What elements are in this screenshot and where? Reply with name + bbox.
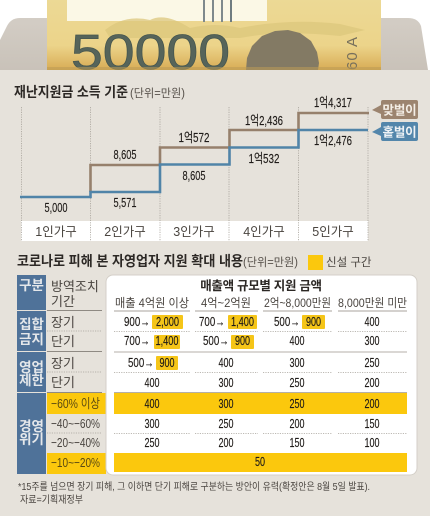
group: business restriction: 영업 (19, 360, 44, 375)
header: duration: 기간 (51, 294, 75, 309)
row: gathering ban short: 500→ (203, 333, 229, 348)
value labels: 1억572 (178, 130, 210, 145)
footnote and source: 자료=기획재정부 (20, 494, 83, 506)
row labels: 장기 (51, 315, 75, 330)
row labels: −60% 이상 (51, 396, 100, 411)
row labels: 단기 (51, 334, 75, 349)
row: restriction short: 300 (218, 375, 234, 390)
row: crisis 40: 200 (290, 416, 304, 431)
row: crisis 60: 300 (218, 396, 234, 411)
household labels strip: 4인가구 (243, 225, 285, 239)
row: gathering ban long: 900 (306, 314, 321, 329)
row: crisis 10: 50 (255, 454, 265, 469)
new bracket highlight bands (114, 393, 407, 414)
column headings: 2억~8,000만원 (264, 296, 331, 310)
row: crisis 40 (144, 416, 380, 431)
row: crisis 40: 150 (364, 416, 380, 431)
row: restriction long: 400 (218, 355, 234, 370)
row: gathering ban long: 400 (364, 314, 380, 329)
row: gathering ban short: 700→ (124, 333, 150, 348)
line: dual income (90, 113, 369, 192)
banknote seal (246, 30, 319, 70)
header: duration: 방역조치 (51, 279, 99, 294)
row: restriction short (144, 375, 380, 390)
legend: new bracket: 신설 구간 (326, 256, 372, 269)
table: row headers (17, 275, 106, 474)
banknote denomination: 50000 (71, 26, 230, 80)
footnote and source (18, 480, 370, 506)
row labels: −20~−40% (51, 435, 100, 450)
footnote and source: *15주를 넘으면 장기 피해, 그 이하면 단기 피해로 구분하는 방안이 유력(확정안은 8월 5일 발표). (18, 480, 370, 493)
row: restriction long: 900 (160, 355, 174, 370)
row: crisis 20: 200 (218, 435, 234, 450)
row: crisis 40: 250 (218, 416, 234, 431)
header: category (17, 275, 46, 310)
row: restriction long: 250 (364, 355, 380, 370)
table: support amounts panel (106, 275, 417, 475)
row: gathering ban long: 700→ (199, 314, 225, 329)
highlighted sales drop rows (47, 393, 106, 414)
row: crisis 20: 100 (364, 435, 380, 450)
row: restriction short: 400 (144, 375, 160, 390)
group: management crisis: 위기 (19, 432, 44, 447)
heading: self-employed support: (단위=만원) (243, 255, 298, 269)
row: gathering ban long: 900→ (124, 314, 150, 329)
row: crisis 60: 250 (290, 396, 304, 411)
column headings: 매출 4억원 이상 (115, 296, 189, 310)
tag: single income: 홑벌이 (383, 124, 416, 140)
row: crisis 20: 250 (144, 435, 160, 450)
step line chart (20, 95, 418, 241)
row: restriction short: 250 (290, 375, 304, 390)
value labels: 1억4,317 (314, 95, 352, 110)
row: gathering ban long: 1,400 (231, 314, 254, 329)
banknote illustration (47, 0, 381, 80)
row labels: 장기 (51, 356, 75, 371)
highlighted cells (152, 315, 325, 370)
row labels: −10~−20% (51, 455, 100, 470)
row: gathering ban short: 1,400 (156, 333, 178, 348)
row: crisis 40: 300 (144, 416, 160, 431)
column headings: 8,000만원 미만 (338, 296, 407, 310)
column headings (115, 296, 407, 310)
household labels strip: 2인가구 (104, 225, 146, 239)
row: gathering ban short: 300 (364, 333, 380, 348)
group: management crisis (17, 393, 46, 474)
row: gathering ban long: 2,000 (156, 314, 179, 329)
banknote serial: 60 A (344, 36, 361, 70)
row: crisis 60: 400 (144, 396, 160, 411)
header: duration (47, 275, 102, 310)
group: management crisis: 경영 (19, 419, 44, 434)
row: gathering ban short: 400 (290, 333, 304, 348)
row: gathering ban short (124, 333, 380, 348)
group: business restriction: 제한 (19, 373, 44, 388)
line: single income (20, 130, 368, 197)
row: gathering ban long: 500→ (274, 314, 300, 329)
group: business restriction (17, 352, 46, 392)
household labels strip: 5인가구 (312, 225, 354, 239)
row: gathering ban long (124, 314, 380, 329)
household labels strip (21, 221, 368, 241)
household labels strip: 1인가구 (35, 225, 77, 239)
heading: income criteria: (단위=만원) (130, 86, 185, 100)
row: crisis 60: 200 (364, 396, 380, 411)
header: category: 구분 (19, 278, 44, 293)
row: crisis 20 (144, 435, 380, 450)
value labels: 5,000 (44, 200, 68, 215)
row labels: −40~−60% (51, 416, 100, 431)
group: gathering ban: 집합 (19, 317, 44, 332)
row: crisis 60 (144, 396, 380, 411)
column headings: 4억~2억원 (201, 296, 251, 310)
tag: single income (372, 122, 418, 141)
row: restriction short: 200 (364, 375, 380, 390)
row labels (51, 315, 100, 470)
value labels (44, 95, 352, 215)
heading: income criteria: 재난지원금 소득 기준 (14, 84, 128, 100)
value labels: 8,605 (114, 147, 136, 162)
panel heading: 매출액 규모별 지원 금액 (200, 278, 322, 293)
value labels: 5,571 (114, 195, 136, 210)
value labels: 8,605 (182, 168, 206, 183)
envelope pocket (0, 18, 428, 70)
row: gathering ban short: 900 (235, 333, 250, 348)
heading: self-employed support: 코로나로 피해 본 자영업자 지원 확대 내용 (17, 253, 243, 269)
row: crisis 20: 150 (290, 435, 304, 450)
group: gathering ban: 금지 (19, 332, 44, 347)
group: gathering ban (17, 311, 46, 351)
row: restriction long: 300 (290, 355, 304, 370)
row labels: 단기 (51, 375, 75, 390)
row: restriction long (128, 355, 380, 370)
household labels strip: 3인가구 (173, 225, 215, 239)
tag: dual income (372, 100, 418, 119)
legend: new bracket (308, 255, 372, 270)
value labels: 1억532 (248, 151, 280, 166)
row: restriction long: 500→ (128, 355, 154, 370)
value labels: 1억2,476 (314, 133, 352, 148)
tag: dual income: 맞벌이 (383, 104, 416, 118)
value labels: 1억2,436 (245, 113, 283, 128)
